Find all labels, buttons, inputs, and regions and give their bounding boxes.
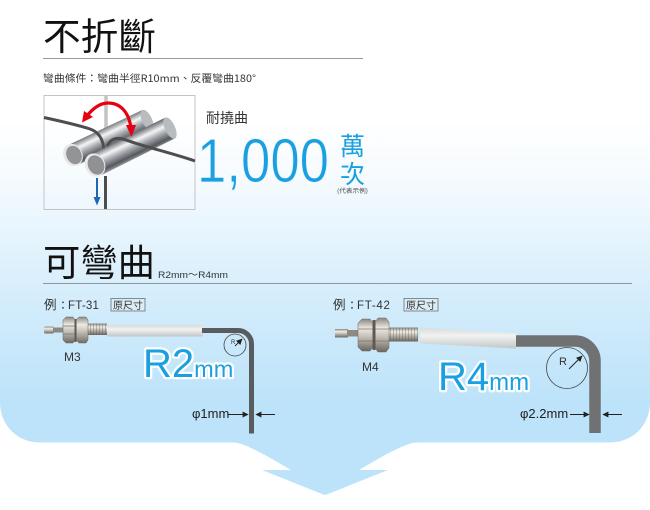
radius circle R2: R — [231, 340, 236, 346]
big label: R4mm: R4mm — [438, 355, 529, 399]
label: 例 FT-31: 例： — [44, 294, 69, 313]
radius circle R2 — [224, 334, 246, 356]
label: 例 FT-31: FT-31 — [68, 300, 99, 312]
sensor body M3 — [44, 317, 203, 343]
label: 耐撓曲: 耐撓曲 — [206, 108, 248, 128]
label: M4: M4 — [362, 360, 379, 374]
unit: 萬次: 萬 — [340, 127, 365, 163]
label: 例 FT-42: 例： — [333, 294, 358, 313]
diameter dimension 2.2mm: φ2.2mm — [520, 406, 568, 421]
background panel with down arrow — [0, 120, 650, 495]
badge: actual size: 原尺寸 — [113, 297, 143, 312]
sensor body M4 — [335, 318, 517, 352]
big number: 1,000: 1,000 — [197, 127, 329, 196]
label: 例 FT-42: FT-42 — [357, 300, 391, 312]
diameter dimension 2.2mm — [520, 406, 622, 421]
big label: R2mm: R2mm — [143, 342, 233, 386]
diameter dimension 1mm — [192, 406, 275, 421]
unit: 萬次: 次 — [340, 155, 365, 191]
note: 代表示例: (代表示例) — [337, 186, 368, 195]
illustration: wire bent over two pipes — [44, 96, 195, 210]
heading: 可彎曲: 可彎曲 — [43, 232, 155, 287]
badge: actual size: 原尺寸 — [406, 297, 436, 312]
diameter dimension 1mm: φ1mm — [192, 406, 229, 421]
radius circle R4 — [546, 348, 588, 388]
example FT-31 — [44, 294, 275, 434]
example FT-42 — [333, 294, 622, 433]
unit: 萬次 — [340, 127, 365, 191]
label: M3: M3 — [64, 350, 81, 364]
bending conditions text: 彎曲條件：彎曲半徑R10mm、反覆彎曲180° — [43, 70, 256, 85]
heading: 不折斷: 不折斷 — [43, 6, 156, 61]
radius circle R4: R — [559, 356, 567, 368]
heading range: R2mm～R4mm: R2mm～R4mm — [158, 270, 228, 281]
bent fiber R4 — [516, 341, 595, 433]
bent fiber R2 — [202, 330, 252, 434]
